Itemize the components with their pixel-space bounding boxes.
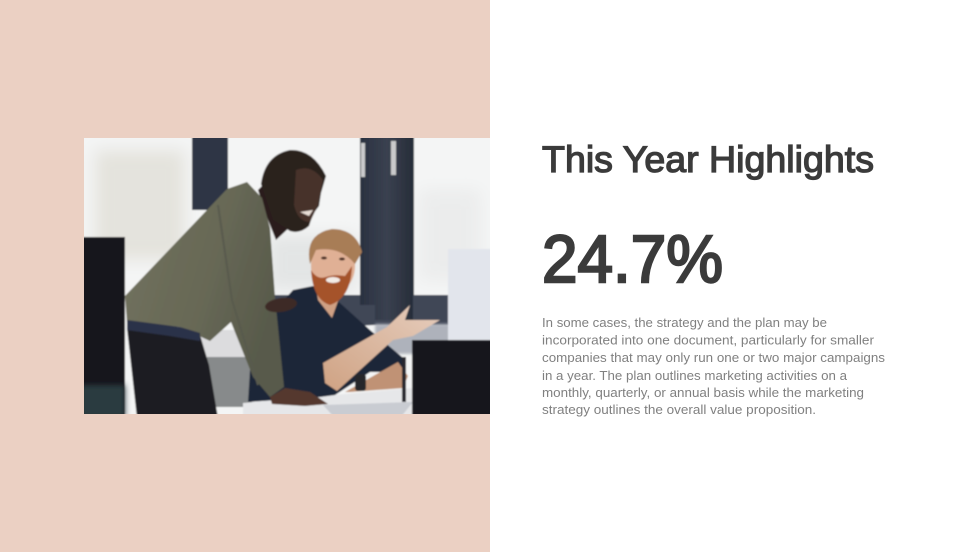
foreground: dark left block — [80, 237, 125, 418]
laptop — [324, 402, 413, 414]
body text: In some cases, the strategy and the plan may be — [542, 315, 827, 330]
chair — [207, 357, 252, 407]
man one: sleeve shadow — [218, 205, 258, 385]
window handles — [361, 141, 396, 177]
man one: head — [261, 150, 326, 232]
foreground: dark right block — [412, 340, 494, 418]
body text: strategy outlines the overall value proposition. — [542, 402, 816, 417]
man one: belt — [127, 320, 200, 341]
man two: beard — [311, 266, 352, 305]
window frame: left post — [192, 134, 228, 210]
body text — [542, 315, 886, 417]
body text: companies that may only run one or two major campaigns — [542, 350, 886, 365]
blurred scenery outside middle window — [268, 235, 356, 290]
blurred scenery outside left window — [95, 150, 185, 260]
man two: face — [310, 248, 356, 284]
photo background: bright window — [80, 134, 494, 418]
man one: hand on shoulder — [264, 297, 298, 313]
man one: shirt and arm — [125, 182, 284, 397]
photo: two colleagues at a desk — [80, 134, 494, 418]
window frame: sill — [274, 294, 449, 327]
man two: far forearm — [345, 362, 408, 392]
desk — [242, 388, 412, 414]
man two: neck — [316, 294, 339, 319]
man one: neck — [257, 186, 288, 240]
title: This Year Highlights — [542, 139, 874, 180]
man two: watch — [355, 374, 366, 391]
panel: pink background — [0, 0, 490, 552]
body text: incorporated into one document, particularly for smaller — [542, 332, 875, 348]
body text: in a year. The plan outlines marketing activities on a — [542, 368, 848, 383]
man two: eyes — [321, 256, 345, 260]
wall behind desk — [200, 330, 246, 358]
man two: torso — [248, 286, 405, 402]
blurred scenery outside right window — [432, 204, 470, 269]
foreground: white monitor — [448, 249, 494, 341]
lower wall at right — [375, 324, 450, 354]
photo scene — [80, 134, 494, 418]
man one: trousers — [127, 328, 218, 418]
man two: hair — [309, 229, 362, 264]
lamp stand — [402, 357, 406, 402]
body text: monthly, quarterly, or annual basis while the marketing — [542, 385, 864, 400]
man one: face highlight — [294, 168, 323, 222]
man two: raised arm — [323, 305, 440, 391]
window frame: right post — [360, 134, 414, 324]
man two: smile — [326, 277, 340, 283]
man one: smile — [300, 210, 313, 216]
man one: hand on desk — [270, 388, 328, 406]
big number: 24.7% — [542, 222, 723, 297]
foreground: lower left tint — [80, 385, 125, 418]
